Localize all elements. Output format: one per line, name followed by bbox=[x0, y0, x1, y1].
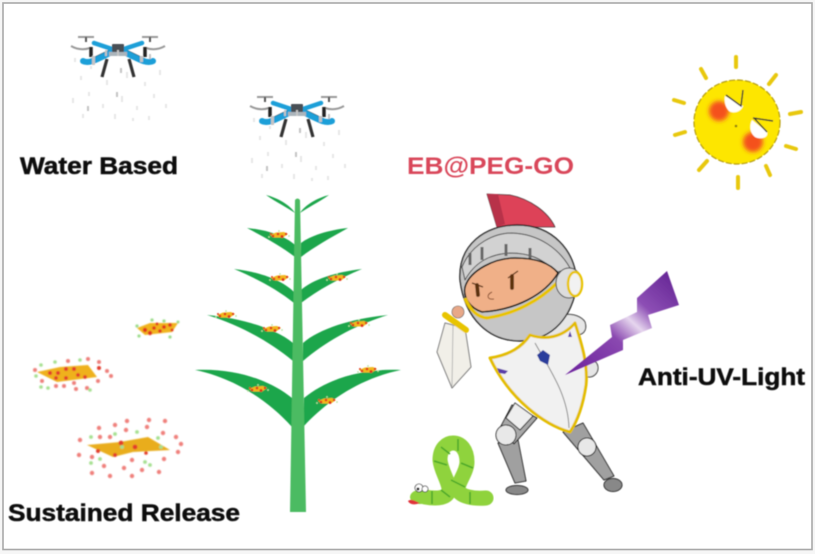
knight visor band bbox=[462, 233, 570, 280]
heading: EB@PEG-GO: EB@PEG-GO bbox=[407, 153, 574, 180]
plant stem bbox=[290, 198, 306, 512]
heading: Water Based: Water Based bbox=[20, 153, 178, 180]
knight ear guard bbox=[556, 268, 582, 298]
particle cluster: medium bbox=[33, 357, 113, 392]
plant with sprayed particles bbox=[195, 195, 401, 512]
knight visor trim bbox=[465, 283, 557, 318]
heading: Anti-UV-Light: Anti-UV-Light bbox=[638, 364, 805, 391]
icon: green worm bbox=[408, 439, 486, 504]
plant leaves bbox=[195, 195, 401, 427]
knight legs bbox=[496, 403, 622, 494]
particle cluster: large bbox=[77, 418, 183, 478]
drone: above plant with water spray bbox=[250, 97, 346, 181]
knight arm behind shield bbox=[580, 359, 598, 377]
icon: angry sun bbox=[674, 57, 801, 188]
knight plume bbox=[487, 194, 555, 227]
particle cluster: small bbox=[135, 318, 180, 339]
heading: Sustained Release: Sustained Release bbox=[8, 500, 240, 527]
knight face bbox=[465, 258, 558, 312]
particles on leaves bbox=[215, 230, 379, 404]
knight shield bbox=[490, 323, 586, 432]
knight helmet bbox=[460, 225, 577, 341]
knight character bbox=[437, 194, 622, 494]
drone: left with water spray bbox=[71, 37, 167, 121]
knight sword bbox=[437, 323, 471, 388]
icon: purple lightning bolt bbox=[565, 271, 679, 375]
